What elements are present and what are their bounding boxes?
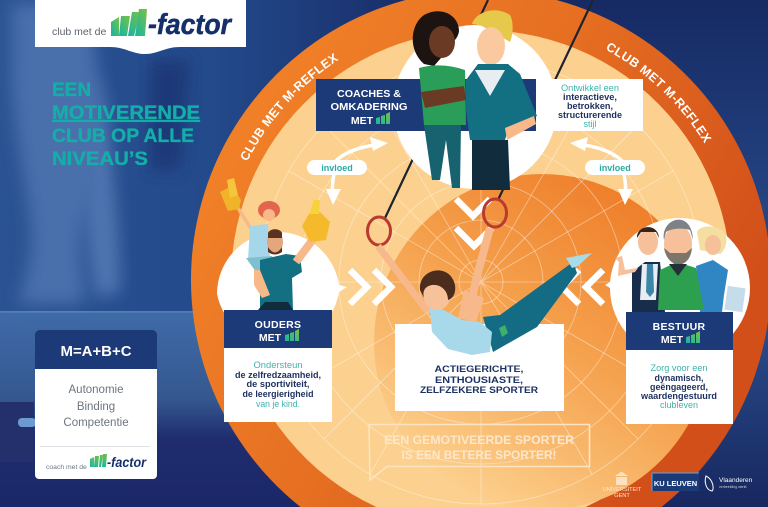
card: M=A+B+C: Autonomie — [69, 384, 123, 396]
card: M=A+B+C: coach met de — [46, 464, 87, 471]
card: M=A+B+C: M=A+B+C — [60, 344, 132, 360]
panel: bestuur label: Zorg voor een — [650, 363, 708, 373]
panel: bestuur label: dynamisch, — [654, 373, 704, 383]
card: M=A+B+C: -factor — [107, 454, 147, 470]
right woman — [696, 226, 746, 312]
pill: invloed: invloed — [321, 163, 353, 173]
logo: vlaanderen: verbeelding werkt — [719, 485, 746, 489]
logo panel: club met de m-factor — [35, 0, 246, 54]
panel: ouders label — [224, 310, 332, 422]
heading: een motiverende club op alle niveau's: EEN — [52, 80, 91, 101]
panel: coaches label: COACHES & — [337, 88, 401, 100]
icon: m bars — [686, 331, 700, 343]
pill: invloed: invloed — [599, 163, 631, 173]
icon: m bars — [285, 329, 299, 341]
logo: universiteit gent: GENT — [614, 493, 630, 499]
panel: ouders circle — [217, 232, 347, 344]
icon: small logo — [90, 454, 107, 467]
arrow: influence left — [307, 137, 388, 205]
panel: ouders label: MET — [259, 332, 282, 344]
heading: een motiverende club op alle niveau's: CLUB OP ALLE — [52, 126, 194, 147]
panel: bestuur label — [626, 312, 733, 424]
panel: coaches label — [316, 79, 643, 131]
panel: sporter box: ZELFZEKERE SPORTER — [420, 385, 538, 396]
panel: bestuur label: MET — [661, 334, 684, 346]
icon: m bars — [376, 112, 390, 124]
heading: een motiverende club op alle niveau's: NIVEAU’S — [52, 149, 148, 170]
panel: coaches label: stijl — [584, 119, 596, 129]
illustration: ouders — [220, 178, 330, 310]
card: M=A+B+C: Binding — [77, 401, 115, 413]
left man — [615, 227, 665, 312]
icon: logo bars — [111, 9, 147, 36]
panel: ouders label: de leergierigheid — [242, 389, 314, 399]
woman — [413, 11, 466, 188]
callout: een gemotiveerde sporter: IS EEN BETERE SPORTER! — [402, 448, 556, 462]
callout: een gemotiveerde sporter: EEN GEMOTIVEERDE SPORTER — [384, 433, 574, 447]
arrows: white chevrons — [350, 199, 603, 304]
panel: coaches label: MET — [351, 115, 374, 127]
panel: coaches label: OMKADERING — [330, 101, 408, 113]
card: M=A+B+C — [35, 330, 157, 479]
panel: bestuur label: geëngageerd, — [650, 382, 708, 392]
logo: vlaanderen — [705, 476, 753, 491]
panel: ouders label: Ondersteun — [254, 360, 302, 370]
panel: bestuur label: clubleven — [660, 400, 698, 410]
panel: ouders label: de sportiviteit, — [246, 379, 310, 389]
heading: een motiverende club op alle niveau's — [52, 80, 200, 170]
illustration: bestuur — [615, 220, 746, 312]
heading: club met M-reflex right: CLUB MET M-REFLEX — [607, 43, 712, 144]
panel: sporter box: ACTIEGERICHTE, — [434, 364, 524, 375]
logo panel: club met de m-factor: club met de — [52, 26, 106, 38]
panel: sporter box — [395, 324, 564, 411]
panel: sporter box: ENTHOUSIASTE, — [435, 375, 523, 386]
logo: vlaanderen: Vlaanderen — [719, 477, 753, 484]
icon: gymnastic rings — [368, 199, 506, 245]
logo: ku leuven: KU LEUVEN — [654, 479, 697, 488]
panel: ouders label: van je kind. — [256, 399, 300, 409]
panel: ouders label: OUDERS — [255, 319, 301, 331]
card: M=A+B+C: Competentie — [63, 417, 129, 429]
panel: coaches label: structurerende — [558, 110, 622, 120]
panel: orange gradient circle — [374, 174, 710, 507]
arrow: influence right — [570, 137, 645, 205]
logo: universiteit gent — [603, 472, 642, 499]
panel: coaches label: Ontwikkel een — [561, 83, 619, 93]
illustration: coaches — [413, 10, 537, 190]
panel: ouders label: de zelfredzaamheid, — [235, 370, 321, 380]
heading: club met M-reflex left: CLUB MET M-REFLEX — [240, 52, 338, 160]
ropes — [385, 0, 593, 218]
target grid lines — [259, 60, 703, 504]
panel: coaches label: betrokken, — [567, 101, 613, 111]
logo: universiteit gent: UNIVERSITEIT — [603, 487, 642, 493]
panel: peach inner circle — [231, 30, 731, 507]
logo: ku leuven — [652, 473, 699, 491]
center man — [658, 220, 704, 310]
illustration: gymnast — [378, 228, 592, 355]
panel: coaches circle — [393, 25, 557, 189]
panel: bestuur circle — [605, 218, 750, 358]
logo panel: club met de m-factor: -factor — [148, 9, 233, 41]
panel: coaches label: interactieve, — [563, 92, 617, 102]
panel: bestuur label: BESTUUR — [653, 321, 706, 333]
heading: een motiverende club op alle niveau's: MOTIVERENDE — [52, 103, 200, 124]
callout: een gemotiveerde sporter — [369, 424, 590, 480]
man — [466, 10, 537, 190]
panel: bestuur label: waardengestuurd — [640, 391, 717, 401]
panel: outer orange ring — [191, 0, 768, 507]
